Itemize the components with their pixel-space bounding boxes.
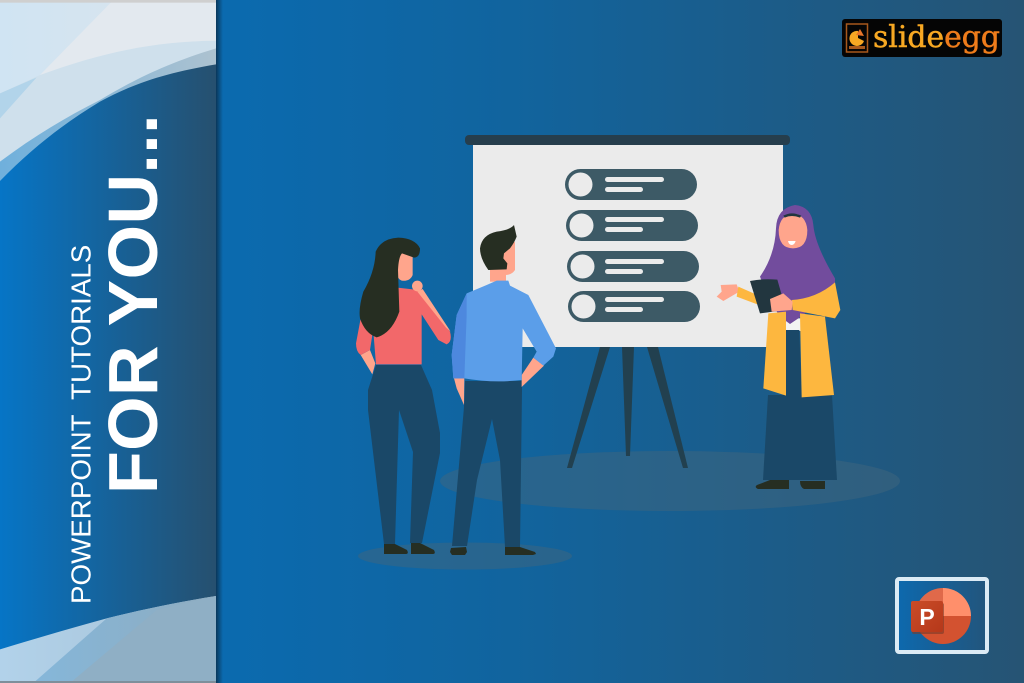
presentation board — [465, 135, 790, 468]
bottom wave decoration — [0, 596, 216, 683]
floor shadow: audience — [358, 542, 572, 570]
top wave decoration — [0, 0, 216, 181]
subtitle: POWERPOINT TUTORIALS: POWERPOINT TUTORIALS — [66, 245, 96, 604]
icon pie — [915, 588, 971, 644]
man upper body — [452, 225, 556, 405]
PowerPoint icon — [897, 579, 987, 652]
icon frame — [897, 579, 987, 652]
figure: man in blue — [450, 225, 556, 555]
heading: FOR YOU...: FOR YOU... — [94, 114, 172, 494]
list item 4 — [568, 291, 700, 322]
logo wordmark: slideegg — [873, 20, 1000, 55]
board surface — [473, 143, 783, 347]
figure: woman in red — [356, 238, 451, 554]
figure: presenter with tablet — [717, 205, 840, 489]
icon P tile: P — [919, 604, 935, 630]
list item 3 — [567, 251, 699, 282]
board legs — [567, 347, 688, 468]
panel shadow — [216, 0, 223, 683]
woman shoes — [384, 543, 435, 554]
woman trousers — [368, 365, 440, 544]
presenter upper body — [717, 205, 840, 397]
presenter skirt — [763, 395, 837, 480]
man shoes — [450, 547, 536, 555]
floor shadow: presenter and board — [440, 451, 900, 511]
left side panel — [0, 0, 223, 683]
man trousers — [452, 381, 522, 547]
board top rail — [465, 135, 790, 145]
logo plate — [842, 19, 1002, 57]
logo icon — [846, 24, 868, 52]
list item 2 — [566, 210, 698, 241]
panel base — [0, 0, 216, 683]
slideegg logo — [842, 19, 1002, 57]
presenter shoes — [756, 480, 825, 489]
woman upper body — [356, 238, 451, 374]
list item 1 — [565, 169, 697, 200]
